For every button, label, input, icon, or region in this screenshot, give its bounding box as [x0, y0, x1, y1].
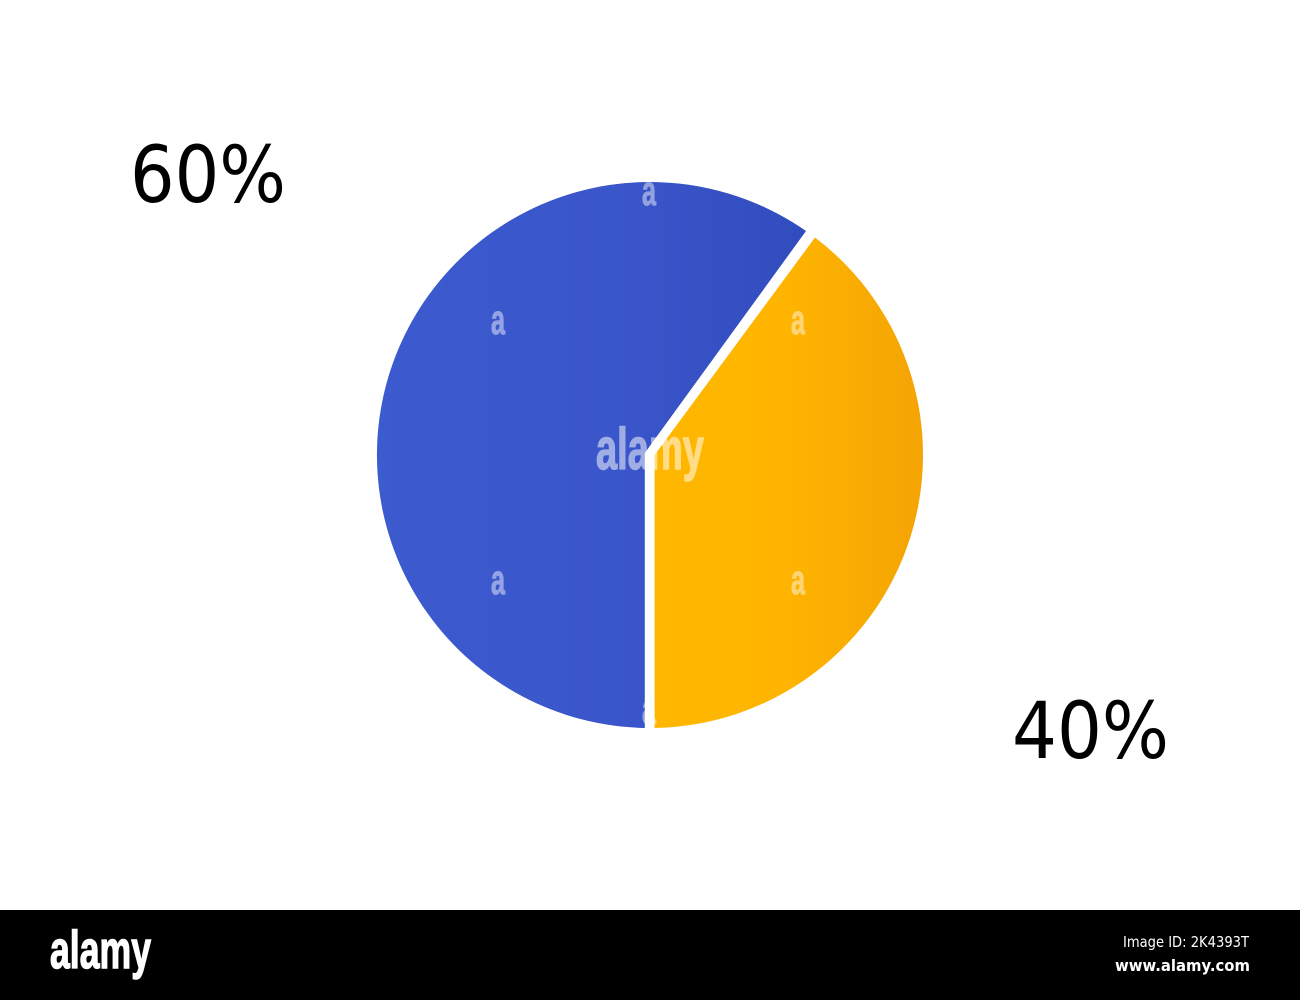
label: 60%: 60%	[130, 131, 286, 221]
footer bar	[0, 910, 1300, 1000]
label: 40%: 40%	[1012, 687, 1169, 777]
site address: www.alamy.com	[1115, 956, 1250, 975]
watermark marks: a	[491, 556, 505, 603]
footer logo: alamy	[50, 921, 151, 980]
watermark marks: a	[642, 167, 656, 214]
pie chart	[377, 182, 923, 728]
watermark marks: a	[642, 685, 656, 732]
watermark marks: a	[791, 296, 805, 343]
slice: 60% blue	[377, 182, 806, 728]
watermark marks	[491, 167, 805, 732]
image id: Image ID: 2K4393T	[1123, 933, 1250, 951]
slice: 40% amber	[655, 238, 923, 728]
watermark marks: a	[491, 296, 505, 343]
watermark marks: alamy	[596, 417, 704, 482]
watermark marks: a	[791, 556, 805, 603]
